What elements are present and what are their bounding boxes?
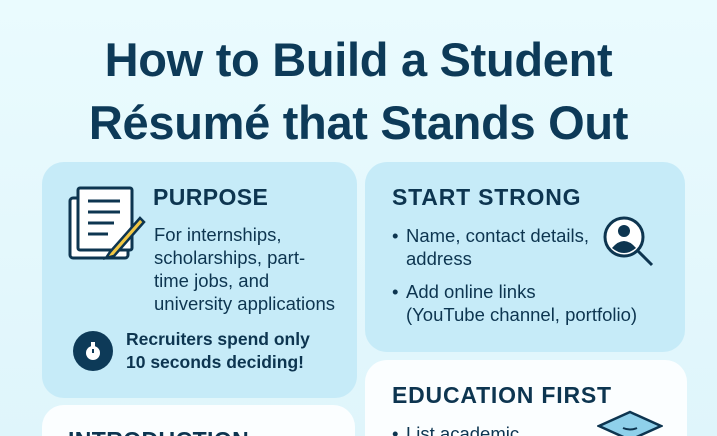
callout: recruiters: 10 seconds deciding! [126,352,304,372]
text: start strong bullets: (YouTube channel, portfolio) [406,304,637,325]
text: purpose: time jobs, and [154,270,269,291]
callout: recruiters: Recruiters spend only [126,329,310,349]
title: Résumé that Stands Out [89,96,628,149]
text: start strong bullets [392,225,637,325]
panel: introduction [42,405,355,436]
icon: person search [604,216,653,266]
icon: stopwatch [73,331,113,371]
text: purpose [154,224,335,314]
icon: document with pencil [68,186,146,260]
icon: graduation cap [597,410,663,436]
text: purpose: university applications [154,293,335,314]
text: start strong bullets: Name, contact details, [406,225,589,246]
heading: education first: EDUCATION FIRST [392,382,612,408]
panel: start strong [365,162,685,352]
text: purpose: scholarships, part- [154,247,305,268]
title: How to Build a Student [105,33,612,86]
heading: purpose: PURPOSE [153,184,268,210]
heading: start strong: START STRONG [392,184,581,210]
text: start strong bullets: address [406,248,472,269]
panel: purpose [42,162,357,398]
callout: recruiters [126,329,310,372]
panel: education first [365,360,687,436]
text: start strong bullets: Add online links [406,281,536,302]
title [89,33,628,149]
text: purpose: For internships, [154,224,282,245]
